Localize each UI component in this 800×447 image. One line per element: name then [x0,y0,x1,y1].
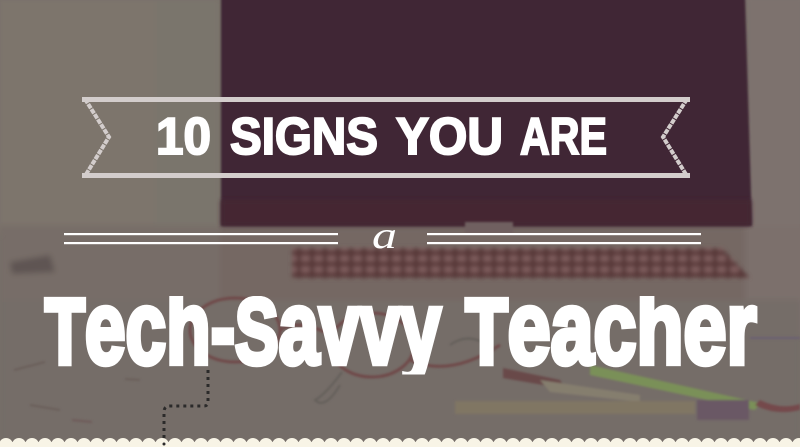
faint marks on desk [14,362,140,422]
laptop screen [221,0,752,226]
heading: 10 signs you are: ARE [520,108,607,166]
dotted connector line [164,370,208,447]
scalloped bottom edge [0,438,800,447]
glasses [190,298,500,377]
divider: right double rule [427,233,701,244]
heading: 10 signs you are: 10 [156,108,211,166]
ribbon banner [82,99,690,176]
title: tech-savvy teacher [44,296,758,374]
keyboard [292,248,750,278]
divider: left double rule [64,233,338,244]
heading: 10 signs you are: SIGNS [230,108,378,166]
heading: 10 signs you are: YOU [396,108,503,166]
heading: 10 signs you are [156,108,607,166]
title: tech-savvy teacher: Tech-Savvy [45,270,441,386]
connector dot on scallop [162,442,166,446]
script word: a: a [372,215,397,257]
pens and pencils [455,337,800,420]
handwriting [315,339,495,403]
